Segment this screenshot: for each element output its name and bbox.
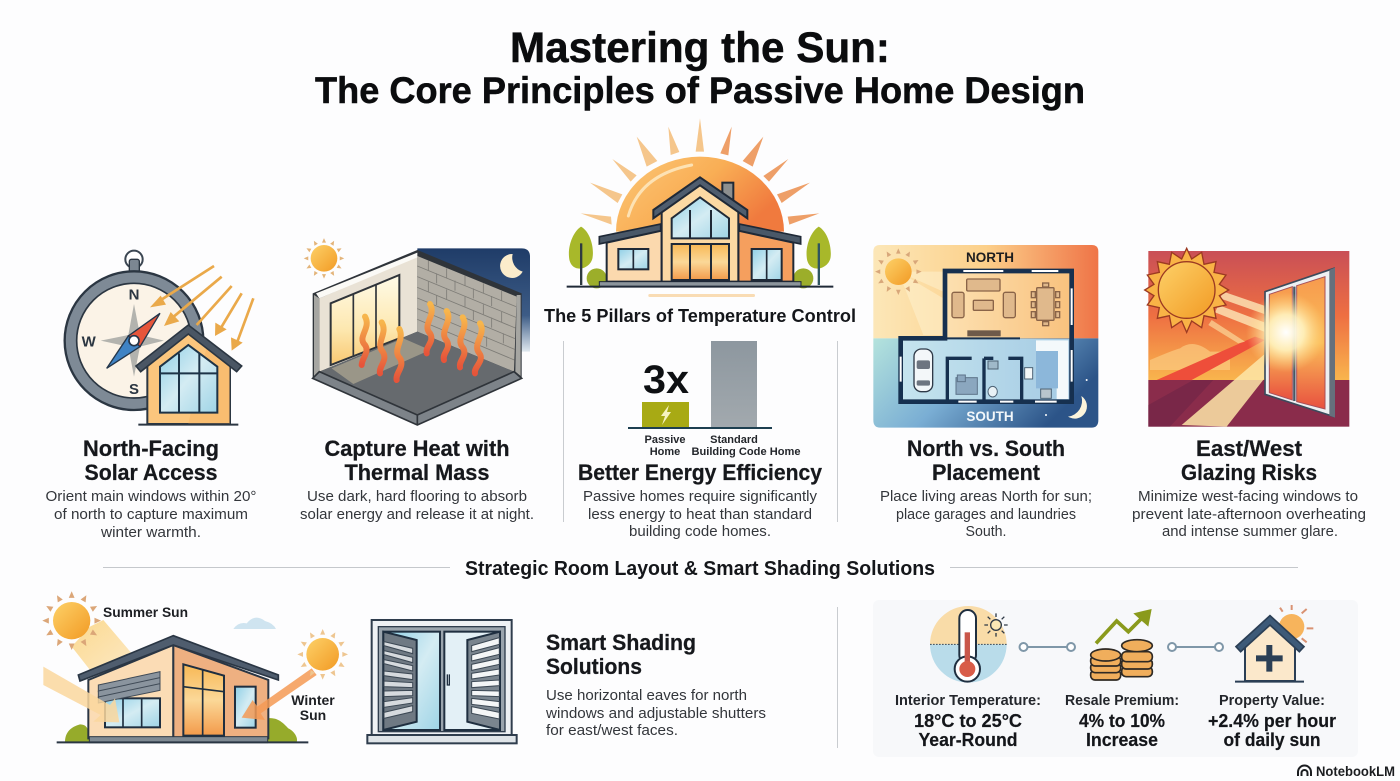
heading: 5 pillars: The 5 Pillars of Temperature Control bbox=[544, 306, 856, 326]
stat: property value bbox=[1208, 693, 1336, 750]
divider left bbox=[563, 341, 564, 522]
icon: house with rising sun bbox=[567, 118, 833, 297]
text: north vs south placement: Placement bbox=[932, 460, 1041, 485]
icon: compass and house: W bbox=[82, 334, 97, 351]
icon: west sun and window glare bbox=[1145, 248, 1349, 427]
text: east west glazing risks: and intense summer glare. bbox=[1162, 524, 1338, 540]
icon: thermal mass room bbox=[304, 238, 530, 425]
text: better energy efficiency: less energy to heat than standard bbox=[588, 507, 812, 523]
text: east west glazing risks: Glazing Risks bbox=[1181, 460, 1317, 485]
stat: interior temperature bbox=[895, 693, 1041, 750]
connector 1 bbox=[1020, 643, 1075, 651]
text: north-facing solar access: winter warmth. bbox=[100, 525, 201, 541]
title: Mastering the Sun: bbox=[510, 25, 890, 72]
icon: house with summer and winter sun bbox=[42, 591, 348, 743]
icon: house value with plus bbox=[1235, 605, 1313, 682]
stat: property value: Property Value: bbox=[1219, 693, 1325, 709]
text: north-facing solar access: Solar Access bbox=[84, 460, 218, 485]
text: north vs south placement: Place living areas North for sun; bbox=[880, 489, 1092, 505]
text: thermal mass: solar energy and release it at night. bbox=[300, 507, 534, 523]
label: winter sun bbox=[291, 692, 335, 723]
text: better energy efficiency bbox=[578, 460, 823, 540]
text: smart shading solutions bbox=[545, 630, 766, 739]
icon: compass and house: N bbox=[129, 286, 139, 303]
bar chart: energy efficiency bbox=[628, 341, 800, 458]
label: winter sun: Sun bbox=[300, 707, 326, 723]
panel: key stats bbox=[873, 600, 1358, 757]
divider right bbox=[837, 341, 838, 522]
stat: interior temperature: Interior Temperature: bbox=[895, 693, 1041, 709]
text: thermal mass: Use dark, hard flooring to absorb bbox=[307, 489, 527, 505]
section heading with rules: Strategic Room Layout & Smart Shading Solutions bbox=[465, 558, 935, 580]
text: north-facing solar access: North-Facing bbox=[83, 436, 219, 461]
stat: resale premium bbox=[1065, 693, 1179, 750]
bar chart: energy efficiency: Standard bbox=[710, 434, 758, 446]
bar chart: energy efficiency: Building Code Home bbox=[692, 446, 800, 458]
text: east west glazing risks: Minimize west-facing windows to bbox=[1138, 489, 1358, 505]
icon: coins and arrow bbox=[1091, 609, 1152, 680]
title bbox=[315, 25, 1085, 111]
stat: resale premium: Resale Premium: bbox=[1065, 693, 1179, 709]
text: north vs south placement: place garages and laundries bbox=[896, 507, 1076, 523]
bar chart: energy efficiency: 3x bbox=[643, 358, 689, 402]
bar chart: energy efficiency: Passive bbox=[645, 434, 685, 446]
text: better energy efficiency: Better Energy Efficiency bbox=[578, 460, 823, 485]
label: summer sun: Summer Sun bbox=[103, 604, 188, 620]
text: smart shading solutions: Smart Shading bbox=[546, 630, 696, 655]
stat: resale premium: 4% to 10% bbox=[1079, 710, 1165, 731]
text: east west glazing risks: prevent late-afternoon overheating bbox=[1132, 507, 1366, 523]
stat: resale premium: Increase bbox=[1086, 729, 1158, 750]
text: smart shading solutions: Solutions bbox=[546, 654, 642, 679]
text: smart shading solutions: windows and adjustable shutters bbox=[545, 706, 766, 722]
stat: property value: of daily sun bbox=[1224, 729, 1320, 750]
stat: property value: +2.4% per hour bbox=[1208, 710, 1336, 731]
text: north-facing solar access: Orient main windows within 20° bbox=[46, 489, 256, 505]
icon: compass and house: S bbox=[129, 381, 139, 398]
text: thermal mass bbox=[300, 436, 534, 523]
connector 2 bbox=[1168, 643, 1223, 651]
text: thermal mass: Thermal Mass bbox=[344, 460, 490, 485]
stat: interior temperature: Year-Round bbox=[918, 729, 1018, 750]
bar chart: energy efficiency: Home bbox=[650, 446, 680, 458]
label: south: SOUTH bbox=[966, 409, 1014, 424]
text: east west glazing risks bbox=[1132, 436, 1366, 540]
label: north: NORTH bbox=[966, 250, 1014, 265]
title: The Core Principles of Passive Home Design bbox=[315, 70, 1085, 111]
text: better energy efficiency: building code homes. bbox=[629, 524, 771, 540]
icon: north south floor plan bbox=[873, 245, 1098, 428]
label: winter sun: Winter bbox=[291, 692, 335, 708]
text: smart shading solutions: Use horizontal eaves for north bbox=[546, 688, 747, 704]
text: thermal mass: Capture Heat with bbox=[324, 436, 510, 461]
text: north vs south placement: South. bbox=[966, 524, 1006, 540]
stat: interior temperature: 18°C to 25°C bbox=[914, 710, 1022, 731]
text: east west glazing risks: East/West bbox=[1196, 436, 1303, 461]
text: north-facing solar access: of north to capture maximum bbox=[54, 507, 248, 523]
text: north-facing solar access bbox=[46, 436, 256, 541]
logo: NotebookLM: NotebookLM bbox=[1316, 764, 1395, 779]
text: smart shading solutions: for east/west faces. bbox=[546, 723, 678, 739]
text: north vs south placement bbox=[880, 436, 1092, 540]
icon: compass and house bbox=[65, 251, 253, 425]
text: better energy efficiency: Passive homes require significantly bbox=[583, 489, 818, 505]
icon: thermometer bbox=[930, 606, 1008, 683]
icon: louvered shutters window bbox=[367, 620, 517, 743]
text: north vs south placement: North vs. South bbox=[907, 436, 1065, 461]
divider bottom bbox=[837, 607, 838, 748]
